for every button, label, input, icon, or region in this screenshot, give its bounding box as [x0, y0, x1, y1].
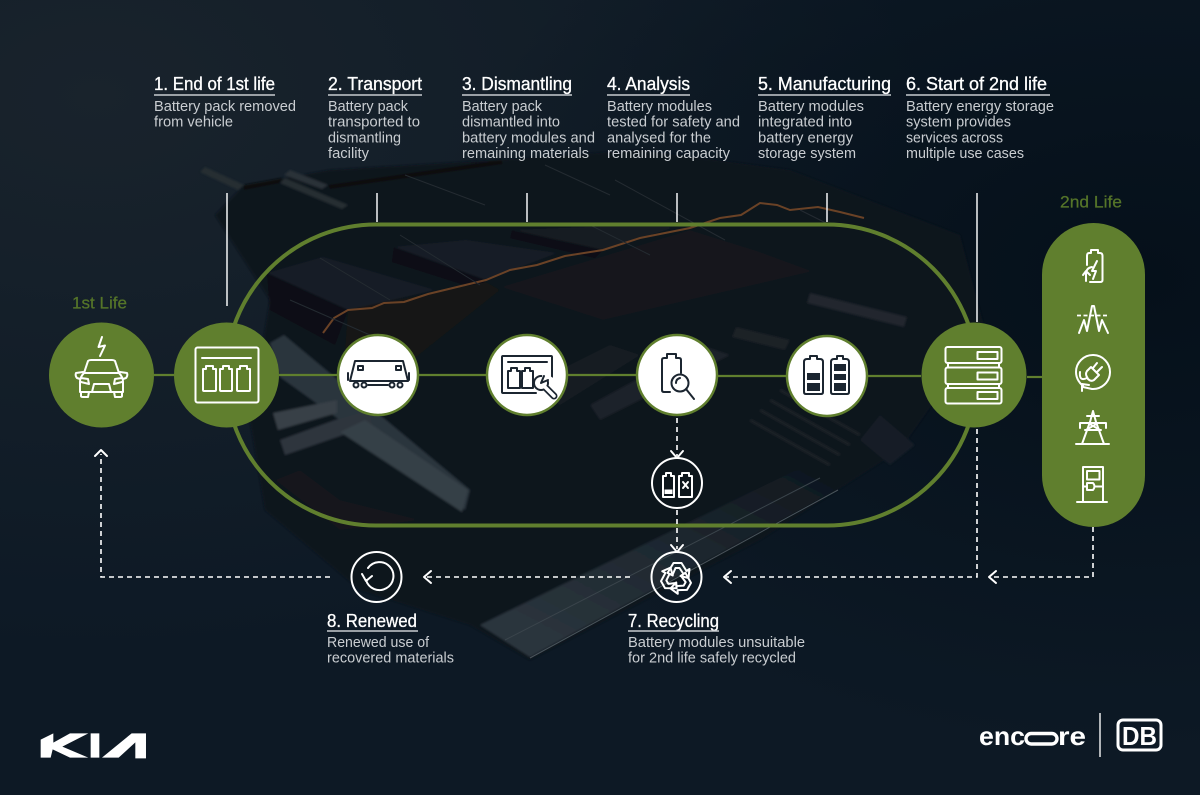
step 2 text [328, 74, 422, 162]
dashed return path: start of 2nd life to recycling [724, 429, 977, 583]
icon: circular plug [1076, 355, 1110, 391]
icon: power pylon [1076, 411, 1109, 444]
step 7 text: 7. Recycling [628, 611, 719, 631]
step 8 text: recovered materials [327, 650, 454, 666]
step 2 text: dismantling [328, 130, 401, 146]
step 3 text: dismantled into [462, 114, 560, 130]
logo: encore: enc [979, 721, 1025, 751]
step 5 text: 5. Manufacturing [758, 74, 891, 94]
dashed return path: recycling to renewed [424, 571, 630, 583]
step 5 text: integrated into [758, 114, 852, 130]
step 6 text: Battery energy storage [906, 98, 1054, 115]
connector lines [154, 375, 1042, 377]
node: dismantling [487, 335, 567, 415]
step leader lines [227, 193, 977, 322]
step 8 text: Renewed use of [327, 634, 430, 651]
step 8 text: 8. Renewed [327, 611, 417, 631]
step 1 text: Battery pack removed [154, 98, 296, 115]
step 2 text: transported to [328, 114, 420, 130]
step 7 text: Battery modules unsuitable [628, 634, 805, 651]
step 3 text: remaining materials [462, 145, 589, 162]
step 3 text [462, 74, 595, 162]
dashed return path: 2nd life to recycling [989, 527, 1093, 583]
node: transport [338, 335, 418, 415]
step 1 text: from vehicle [154, 114, 233, 130]
step 4 text [607, 74, 740, 162]
step 4 text: analysed for the [607, 130, 711, 146]
step 6 text [906, 74, 1054, 162]
node: analysis [637, 335, 717, 415]
step 4 text: Battery modules [607, 98, 712, 115]
panel: 2nd life use cases [1042, 223, 1145, 527]
step 5 text: Battery modules [758, 98, 864, 115]
1st Life label: 1st Life [72, 294, 127, 312]
dashed return path: renewed to 1st life [95, 450, 330, 577]
2nd Life label: 2nd Life [1060, 192, 1122, 212]
step 4 text: tested for safety and [607, 114, 740, 130]
step 3 text: Battery pack [462, 98, 542, 115]
icon: battery recharge [1083, 250, 1102, 282]
step 8 text [327, 611, 454, 666]
node: recycling [652, 552, 702, 602]
step 7 text: for 2nd life safely recycled [628, 650, 796, 666]
icon: charging station [1077, 467, 1107, 502]
logo: encore: re [1058, 721, 1086, 751]
node: unsuitable batteries [652, 458, 702, 508]
logo: Kia [41, 733, 146, 758]
step 5 text: battery energy [758, 130, 853, 146]
step 7 text [628, 611, 805, 666]
step 6 text: 6. Start of 2nd life [906, 74, 1047, 94]
node: battery energy storage [922, 322, 1026, 428]
step 2 text: Battery pack [328, 98, 408, 115]
dashed path: analysis to rejected [671, 418, 683, 458]
step 5 text: storage system [758, 145, 856, 162]
node: renewed [352, 552, 402, 602]
loop track [226, 224, 977, 526]
logo: encore [979, 721, 1086, 751]
logo: DB: DB [1122, 721, 1157, 751]
step 6 text: multiple use cases [906, 145, 1024, 162]
step 6 text: system provides [906, 114, 1011, 130]
node: electric car (1st life) [49, 322, 154, 428]
step 1 text [154, 74, 296, 130]
dashed path: rejected to recycling [671, 510, 683, 552]
step 4 text: remaining capacity [607, 145, 730, 162]
step 3 text: 3. Dismantling [462, 74, 572, 94]
logo divider [1099, 713, 1101, 757]
step 2 text: facility [328, 145, 369, 162]
step 1 text: 1. End of 1st life [154, 74, 275, 94]
step 5 text [758, 74, 891, 162]
step 6 text: services across [906, 130, 1003, 146]
step 3 text: battery modules and [462, 130, 595, 146]
step 2 text: 2. Transport [328, 74, 422, 94]
icon: grid services spike [1077, 306, 1109, 333]
node: manufacturing [787, 336, 867, 416]
step 4 text: 4. Analysis [607, 74, 690, 94]
node: battery pack removal [174, 322, 279, 428]
